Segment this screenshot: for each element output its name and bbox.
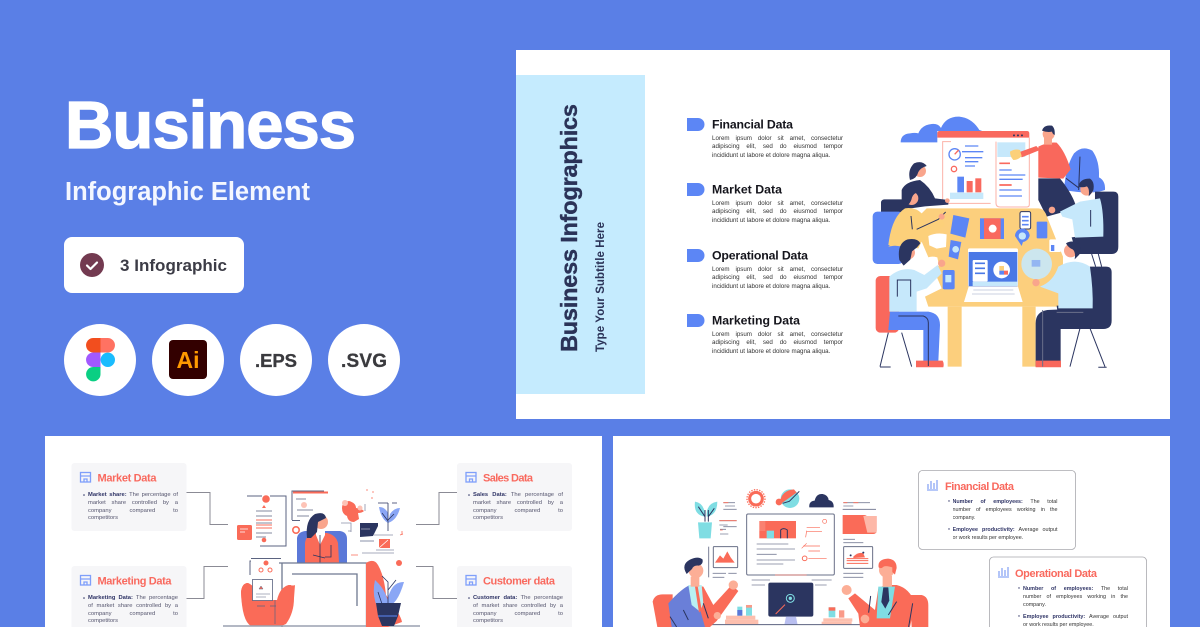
front left person [876,239,945,367]
item: Marketing Data: incididunt ut labore et dolore magna aliqua. [712,348,830,355]
box: Financial Data: or work results per employee. [952,535,1023,541]
seated woman, navy top [881,162,950,217]
box: Market Data: Market Data [98,472,157,484]
icon: SVG [328,324,400,396]
icon: EPS: .EPS [255,350,297,371]
man right [842,559,928,627]
woman in yellow [888,187,946,248]
box: Customer data: company compared to [473,611,563,617]
woman [297,513,347,563]
item: Market Data: incididunt ut labore et dolore magna aliqua. [712,217,830,224]
panel: bottom left slide [45,436,602,627]
plant leaves [1064,148,1105,192]
main screen [747,514,834,575]
box: Financial Data: Number of employees: The total [952,499,1057,505]
title: Business: Business [65,88,356,163]
laptop [964,248,1023,302]
front right person [1021,241,1112,367]
box: Sales Data: company compared to [473,508,563,514]
connector lines [186,492,457,598]
subtitle: Infographic Element: Infographic Element [65,178,310,206]
box: Financial Data: number of employees working in the [952,507,1058,513]
box: Financial Data: Employee productivity: Average output [952,527,1058,533]
floor [223,625,420,627]
box: Financial Data [918,470,1076,550]
blue armchair [873,212,903,264]
seated man, upper right [1049,157,1118,267]
box: Market Data: market share controlled by a [88,500,178,506]
item: Financial Data: adipiscing elit, sed do eiusmod tempor [712,143,843,150]
pie [776,489,799,508]
man left [653,558,738,627]
monitor [768,583,813,625]
box: Customer data: competitors [473,618,503,624]
orange armchair [241,580,295,626]
item: Financial Data [687,118,843,162]
box: Market Data: Market share: The percentage of [88,492,178,498]
desk items [712,605,870,625]
cloud [809,494,834,507]
icon: SVG: .SVG [341,351,387,372]
panel: bottom right slide [613,436,1170,627]
plant [695,502,717,538]
box: Financial Data: Financial Data [945,481,1015,493]
plant [366,560,404,627]
box: Market Data: competitors [88,515,118,521]
item: Financial Data: incididunt ut labore et dolore magna aliqua. [712,152,830,159]
illustration: woman at desk [223,490,420,627]
item: Marketing Data: adipiscing elit, sed do eiusmod tempor [712,339,843,346]
box: Customer data [457,566,572,627]
cloud [901,117,986,142]
item: Operational Data: incididunt ut labore et dolore magna aliqua. [712,283,830,290]
item: Operational Data: adipiscing elit, sed do eiusmod tempor [712,274,843,281]
item: Marketing Data [687,314,843,358]
box: Sales Data: market share controlled by a [473,500,563,506]
box: Marketing Data: of market share controlled by a [88,603,178,609]
box: Marketing Data: competitors [88,618,118,624]
sidebar with vertical heading [516,75,645,394]
box: Customer data: of market share controlled by a [473,603,563,609]
table [888,208,1063,367]
small doc and rings [250,558,281,575]
box: Sales Data [457,463,572,531]
box: Customer data: Customer data: The percentage [473,595,563,601]
item: Market Data: Lorem ipsum dolor sit amet, consectetur [712,200,843,206]
table items [924,212,1061,289]
item: Financial Data: Lorem ipsum dolor sit amet, consectetur [712,134,843,142]
icon: Adobe Illustrator [152,324,224,396]
badge: 3 Infographic [64,237,244,293]
item: Operational Data: Operational Data [712,248,808,262]
item: Operational Data [687,248,843,292]
icon: Figma [64,324,136,396]
box: Marketing Data [72,566,186,627]
box: Sales Data: Sales Data [483,472,534,484]
box: Marketing Data: Marketing Data: The percentage [88,595,178,601]
box: Market Data [72,463,186,531]
item: Market Data [687,182,843,226]
sidebar with vertical heading: Business Infographics [556,104,582,352]
badge: 3 Infographic: 3 Infographic [120,256,227,275]
box: Operational Data: company. [1023,602,1046,608]
icon: EPS [240,324,312,396]
box: Sales Data: Sales Data: The percentage of [473,492,563,498]
box: Market Data: company compared to [88,508,178,514]
box: Operational Data: Operational Data [1015,568,1098,580]
box: Operational Data: Number of employees: The total [1023,586,1128,592]
chart board [292,491,328,533]
chart cards [709,509,877,577]
desk [279,563,367,627]
box: Marketing Data: Marketing Data [98,576,172,588]
box: Operational Data: number of employees working in the [1023,594,1128,600]
sidebar with vertical heading: Type Your Subtitle Here [595,222,607,352]
item: Marketing Data: Marketing Data [712,314,800,328]
item: Financial Data: Financial Data [712,118,793,132]
standing man [1010,126,1077,217]
box: Operational Data [990,557,1146,627]
presentation board [937,131,1029,208]
box: Marketing Data: company compared to [88,611,178,617]
panel: business infographics slide [516,50,1170,419]
icon: Adobe Illustrator: Ai [176,347,200,373]
box: Operational Data: Employee productivity: Average output [1023,614,1128,620]
item: Marketing Data: Lorem ipsum dolor sit amet, consectetur [712,330,843,338]
item: Market Data: Market Data [712,182,782,196]
item: Operational Data: Lorem ipsum dolor sit amet, consectetur [712,266,843,272]
box: Sales Data: competitors [473,515,503,521]
item: Market Data: adipiscing elit, sed do eiusmod tempor [712,208,843,215]
box: Financial Data: company. [952,515,975,521]
gear [747,490,765,508]
illustration: two businessmen with screens [653,489,928,627]
document [237,495,286,546]
illustration: team meeting around a table [873,117,1118,367]
box: Customer data: Customer data [483,576,556,588]
labels [713,503,870,585]
floating leaf, blob and chart [341,490,403,555]
